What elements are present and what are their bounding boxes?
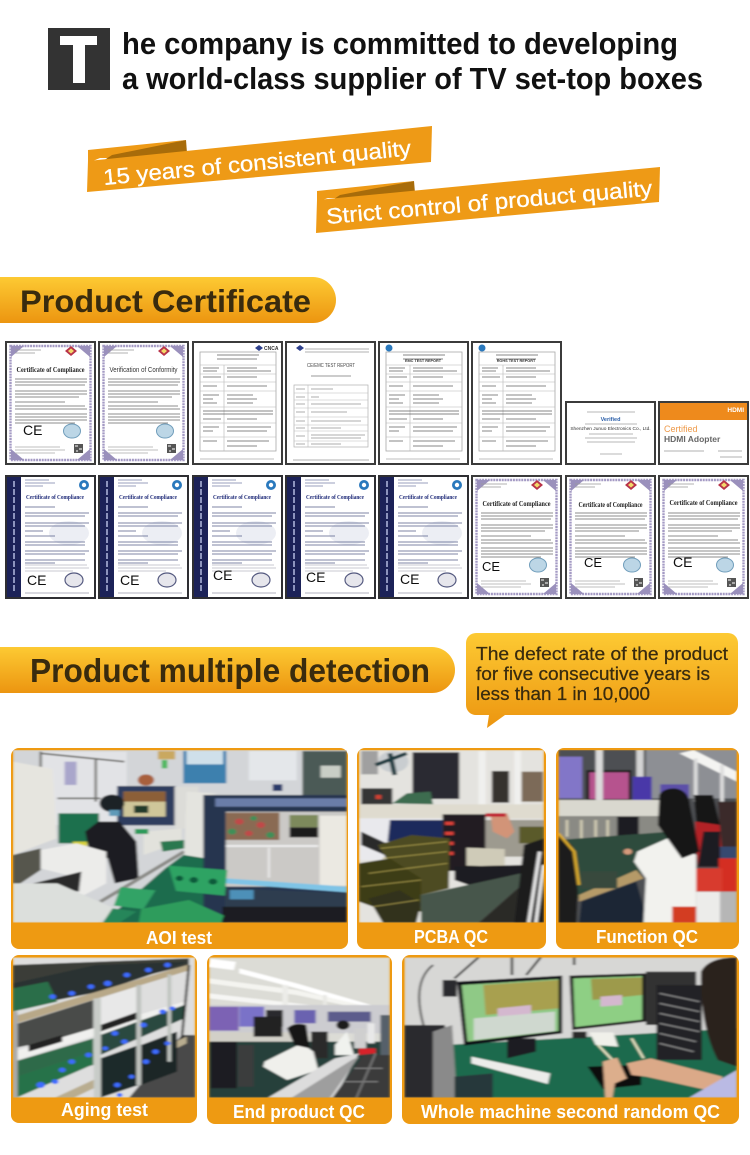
certificate 12: blue compliance: Certificate of Compliance xyxy=(306,494,364,501)
heading line two: a world-class supplier of TV set-top boxes xyxy=(122,62,703,96)
panel: certificate wall xyxy=(5,341,749,599)
photo: aging racks with blue LEDs xyxy=(13,957,195,1098)
certificate 12: blue compliance: CE xyxy=(306,569,325,585)
certificate 11: blue compliance xyxy=(192,475,283,599)
caption: Whole machine second random QC xyxy=(421,1101,720,1122)
photo: AOI inspection machines xyxy=(13,750,347,923)
certificate 4: CE EMC report: CE/EMC TEST REPORT xyxy=(307,363,356,369)
certificate 9: blue compliance xyxy=(5,475,96,599)
heading line one: he company is committed to developing xyxy=(122,27,678,61)
certificate 2: verification: Verification of Conformity xyxy=(110,365,178,374)
certificate 1: compliance xyxy=(5,341,96,465)
certificate 11: blue compliance: CE xyxy=(213,567,232,583)
photo: operator testing with monitors xyxy=(404,957,737,1098)
section banner: Product Certificate: Product Certificate xyxy=(20,283,311,319)
callout: defect rate speech bubble: for five consecutive years is xyxy=(476,663,710,684)
ribbon: 15 years of consistent quality xyxy=(87,126,432,192)
caption: PCBA QC xyxy=(414,926,488,947)
certificate 5: EMC report: EMC TEST REPORT xyxy=(405,359,442,363)
caption: End product QC xyxy=(233,1101,365,1122)
certificate 10: blue compliance: Certificate of Compliance xyxy=(119,494,177,501)
photo: end product line xyxy=(208,957,390,1098)
certificate 13: blue compliance: Certificate of Compliance xyxy=(399,494,457,501)
panel: End product QC xyxy=(207,955,392,1124)
certificate 16: purple compliance xyxy=(658,475,749,599)
certificate 6: RoHS report xyxy=(471,341,562,465)
heading: company commitment xyxy=(48,23,703,97)
photo: function test line xyxy=(558,750,737,923)
certificate 8: HDMI adopter: HDMI xyxy=(727,407,744,414)
certificate 8: HDMI adopter: HDMI Adopter xyxy=(664,434,721,444)
certificate 1: compliance: CE xyxy=(23,422,42,438)
certificate 7: verified adopter letter xyxy=(565,401,656,465)
certificate 14: purple compliance xyxy=(471,475,562,599)
certificate 13: blue compliance: CE xyxy=(400,571,419,587)
certificate 3: test report xyxy=(192,341,283,465)
certificate 10: blue compliance xyxy=(98,475,189,599)
panel: Whole machine second random QC xyxy=(402,955,739,1124)
certificate 14: purple compliance: CE xyxy=(482,559,500,574)
caption: AOI test xyxy=(146,927,212,948)
ribbon: strict control of product quality xyxy=(316,167,660,233)
certificate 7: verified adopter letter: Verified xyxy=(601,417,620,423)
certificate 13: blue compliance xyxy=(378,475,469,599)
caption: Function QC xyxy=(596,926,698,947)
certificate 14: purple compliance: Certificate of Compliance xyxy=(482,499,551,508)
certificate 3: test report: CNCA xyxy=(264,346,279,352)
certificate 8: HDMI adopter xyxy=(658,401,749,465)
certificate 16: purple compliance: CE xyxy=(673,554,692,570)
caption: Aging test xyxy=(61,1099,148,1120)
certificate 8: HDMI adopter: Certified xyxy=(664,424,698,434)
panel: PCBA QC xyxy=(357,748,546,949)
callout: defect rate speech bubble: less than 1 in 10,000 xyxy=(476,683,650,704)
certificate 15: purple compliance xyxy=(565,475,656,599)
certificate 4: CE EMC report xyxy=(285,341,376,465)
certificate 16: purple compliance: Certificate of Compliance xyxy=(670,498,738,507)
certificate 15: purple compliance: Certificate of Compliance xyxy=(578,501,642,509)
callout: defect rate speech bubble xyxy=(466,633,738,728)
certificate 2: verification xyxy=(98,341,189,465)
certificate 11: blue compliance: Certificate of Compliance xyxy=(213,494,271,501)
panel: Function QC xyxy=(556,748,739,949)
icon: drop cap T xyxy=(48,23,110,97)
certificate 9: blue compliance: CE xyxy=(27,572,46,588)
panel: AOI test xyxy=(11,748,348,949)
section banner: Product multiple detection: Product multiple detection xyxy=(30,652,430,689)
ribbon: strict control of product quality: Strict control of product quality xyxy=(325,176,653,229)
certificate 1: compliance: Certificate of Compliance xyxy=(16,365,85,374)
photo: PCBA inspection bench xyxy=(359,750,544,923)
panel: Aging test xyxy=(11,955,197,1123)
certificate 10: blue compliance: CE xyxy=(120,572,139,588)
certificate 12: blue compliance xyxy=(285,475,376,599)
certificate 15: purple compliance: CE xyxy=(584,555,602,570)
section banner: Product Certificate xyxy=(0,277,336,323)
certificate 7: verified adopter letter: Shenzhen Junuo Electronics Co., Ltd. xyxy=(570,426,651,432)
certificate 5: EMC report xyxy=(378,341,469,465)
ribbon: 15 years of consistent quality: 15 years of consistent quality xyxy=(102,135,412,190)
certificate 9: blue compliance: Certificate of Compliance xyxy=(26,494,84,501)
callout: defect rate speech bubble: The defect rate of the product xyxy=(476,643,728,664)
certificate 6: RoHS report: ROHS TEST REPORT xyxy=(497,359,536,363)
